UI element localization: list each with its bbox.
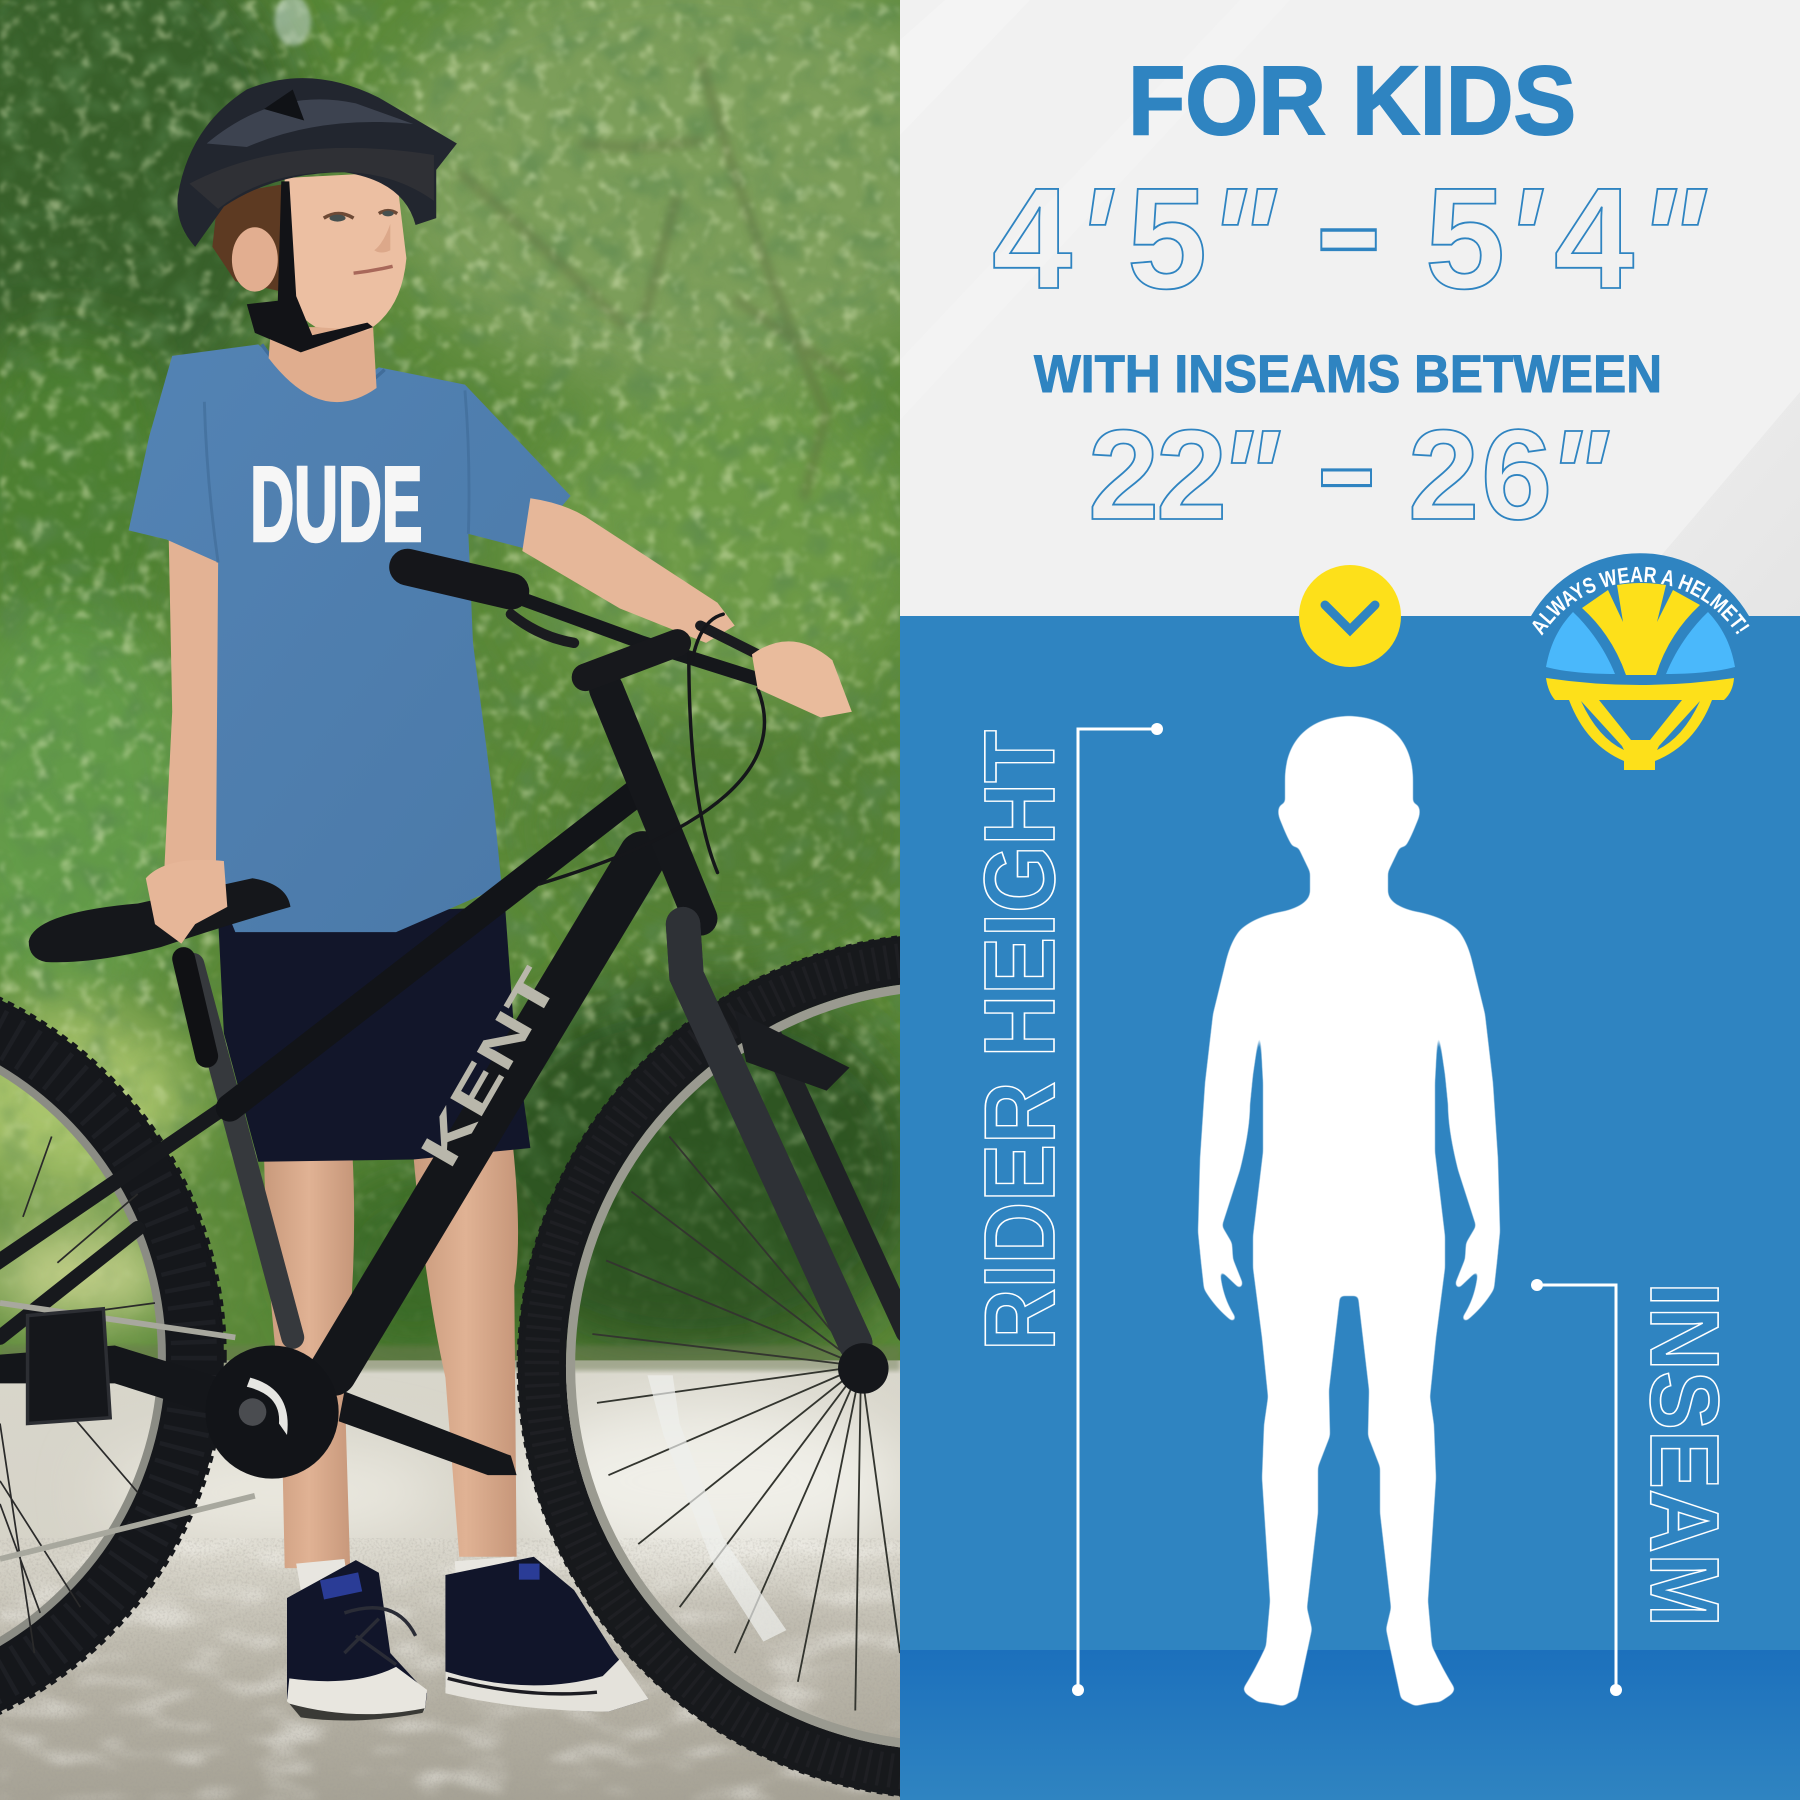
front hub [838, 1343, 889, 1394]
panel: top heading background [900, 0, 1800, 616]
inseam measure line [1531, 1279, 1622, 1696]
pedal [28, 1309, 110, 1424]
helmet straps [1546, 678, 1734, 770]
helmet strap [247, 181, 373, 352]
helmet right vent [1666, 612, 1735, 674]
rear wheel [0, 961, 224, 1751]
inseam range [1088, 378, 1609, 554]
rider height range: 4 [1554, 158, 1634, 319]
label: rider height: RIDER HEIGHT [964, 730, 1076, 1351]
inseam range: " [1547, 404, 1609, 547]
wheel reflector [647, 1375, 786, 1642]
rider height range: 5 [1127, 158, 1207, 319]
right shoe [445, 1557, 649, 1712]
front fork over wheel [683, 924, 855, 1343]
front wheel [519, 934, 1382, 1798]
chainring and cranks [0, 1345, 517, 1479]
rider height range: – [1318, 116, 1379, 334]
subheading: with inseams between: WITH INSEAMS BETWEEN [1034, 345, 1662, 404]
shirt logo: DUDE [250, 446, 422, 564]
road surface [0, 1345, 907, 1800]
handlebar [517, 597, 832, 703]
bike frame [0, 567, 907, 1372]
hair [212, 184, 287, 293]
helmet [177, 78, 457, 247]
label: inseam: INSEAM [1630, 1282, 1739, 1627]
shirt [129, 344, 571, 932]
rear stays [0, 1108, 224, 1337]
helmet left vent [1546, 612, 1615, 674]
left leg [264, 1154, 354, 1568]
floor band [900, 1650, 1800, 1800]
seat post [184, 959, 207, 1056]
head tube [606, 689, 700, 918]
brake lever [511, 614, 827, 695]
frame logo: KENT [409, 959, 569, 1177]
neck [269, 327, 377, 402]
inseam range: " [1218, 404, 1280, 547]
rider height range: " [1637, 158, 1707, 319]
panel: blue sizing background [900, 616, 1800, 1800]
right leg [413, 1148, 518, 1557]
second fork blade [769, 1033, 907, 1332]
left arm [164, 540, 218, 866]
right sock [454, 1556, 514, 1573]
handlebar grip [408, 567, 511, 591]
fork [683, 924, 855, 1343]
left sock [296, 1559, 347, 1590]
inseam range: 6 [1481, 404, 1552, 547]
helmet shell [1582, 583, 1700, 675]
rider height range: 5 [1425, 158, 1505, 319]
rider height range: ' [1505, 158, 1544, 319]
cables [540, 614, 764, 884]
rider height range: ' [1076, 158, 1115, 319]
panel: photo of boy with bike [0, 0, 900, 1800]
right arm [522, 498, 735, 643]
inseam range: 2 [1408, 404, 1479, 547]
down tube [333, 855, 643, 1372]
inseam range: – [1319, 378, 1374, 554]
front brake [735, 1010, 850, 1091]
heading: for kids: FOR KIDS [1128, 46, 1576, 155]
top tube [230, 792, 637, 1108]
foliage background [0, 0, 900, 1360]
rider height range: 4 [992, 158, 1072, 319]
rider height range: " [1207, 158, 1277, 319]
child silhouette [1198, 716, 1500, 1706]
chain [0, 1303, 255, 1559]
rider height measure line [1072, 723, 1163, 1696]
stem [585, 643, 677, 677]
saddle [29, 878, 290, 962]
inseam range: 2 [1156, 404, 1227, 547]
shorts [218, 907, 530, 1162]
face [281, 172, 406, 331]
seat tube [193, 964, 293, 1337]
ear [232, 227, 278, 292]
badge text: ALWAYS WEAR A HELMET! [1532, 566, 1750, 636]
hand on handlebar [752, 641, 852, 718]
rider height range [992, 116, 1707, 334]
inseam range: 2 [1088, 404, 1159, 547]
left shoe [287, 1560, 427, 1721]
hand on saddle [146, 860, 227, 944]
icon: yellow chevron button [1299, 565, 1401, 667]
icon: always wear a helmet badge [1531, 553, 1750, 770]
